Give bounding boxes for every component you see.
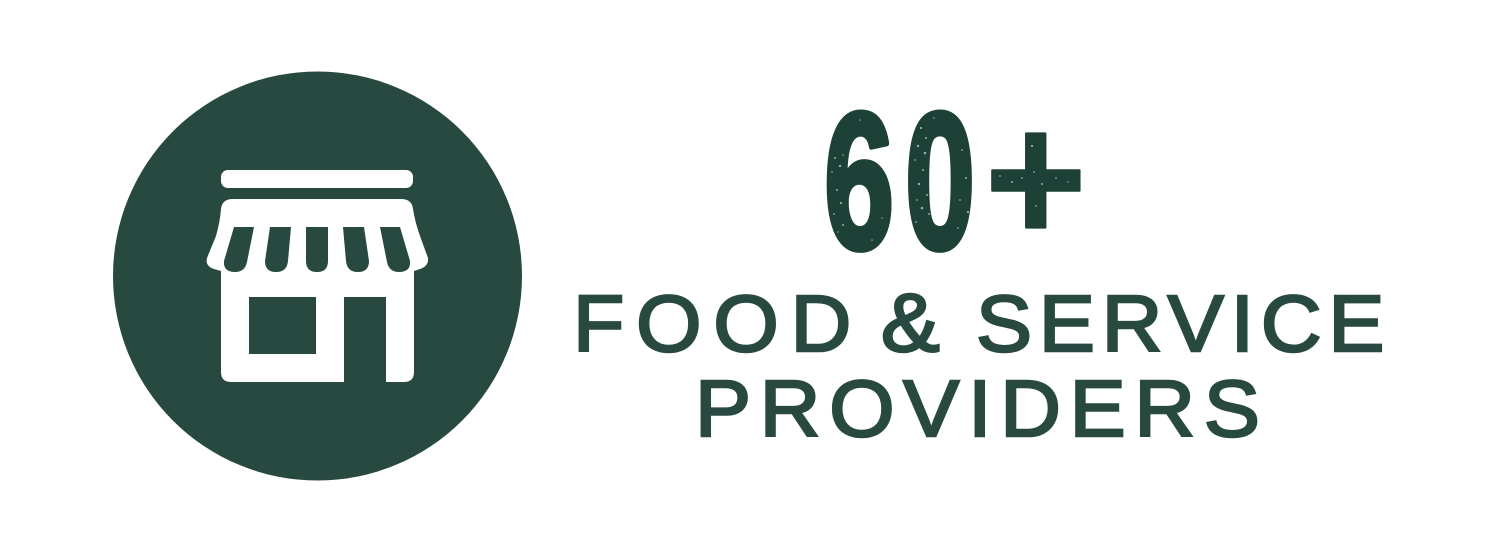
label: food and service providers bbox=[573, 278, 1384, 454]
stat number: 60+ bbox=[824, 73, 1087, 290]
label: food and service providers: PROVIDERS bbox=[695, 365, 1260, 454]
stat number: 60+: 0 bbox=[905, 73, 975, 290]
stat number: 60+: 6 bbox=[824, 73, 894, 290]
stat number: 60+: + bbox=[985, 76, 1087, 282]
label: food and service providers: FOOD bbox=[573, 280, 851, 369]
label: food and service providers: SERVICE bbox=[976, 280, 1384, 369]
label: food and service providers: & bbox=[881, 278, 940, 369]
icon background circle bbox=[113, 72, 522, 480]
icon: storefront in circle bbox=[113, 72, 522, 480]
storefront glyph bbox=[207, 170, 428, 382]
